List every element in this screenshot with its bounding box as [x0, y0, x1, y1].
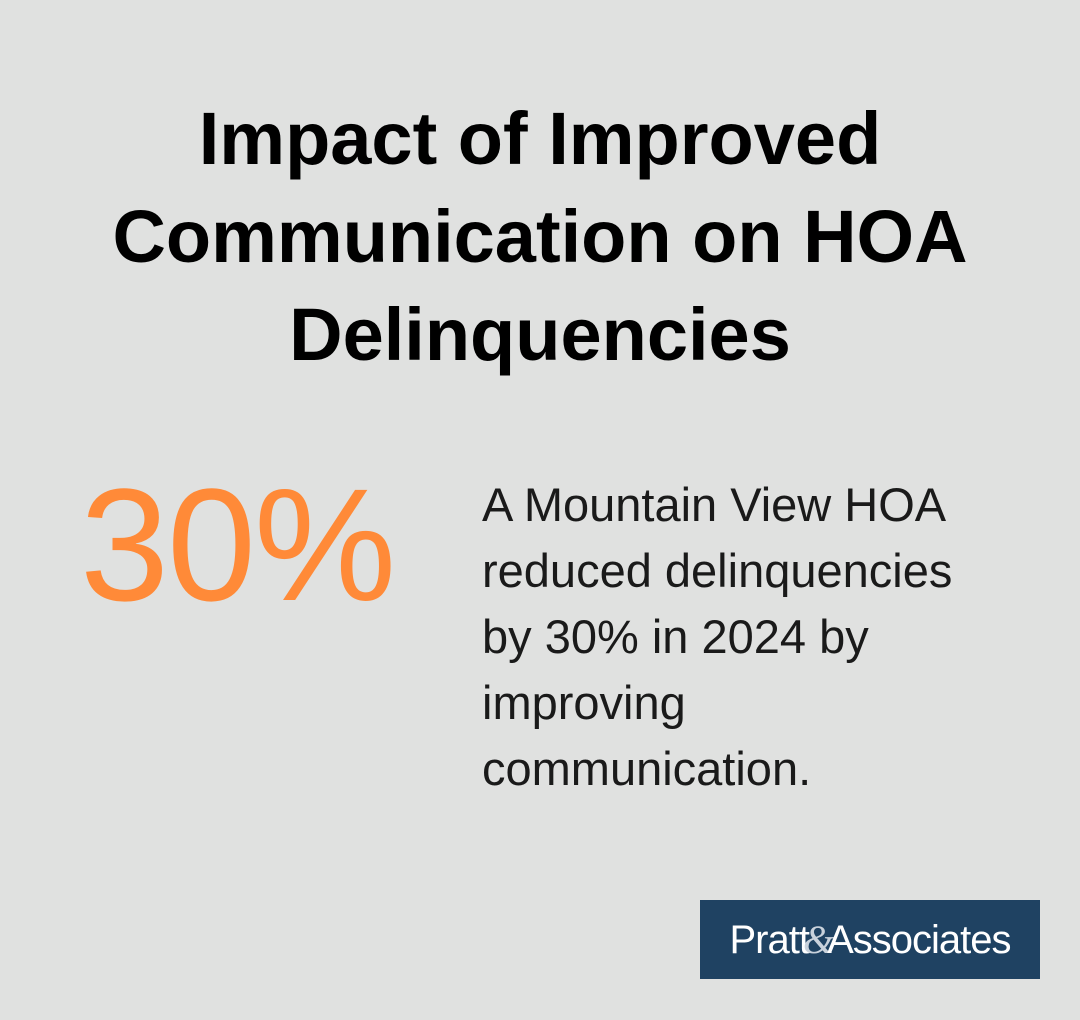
title: Impact of Improved — [199, 97, 881, 180]
description text: by 30% in 2024 by — [482, 610, 869, 663]
description text: reduced delinquencies — [482, 544, 952, 597]
description text — [482, 478, 952, 795]
big stat: 30%: 30% — [80, 455, 394, 634]
title — [112, 97, 968, 376]
description text: A Mountain View HOA — [482, 478, 946, 531]
description text: communication. — [482, 742, 811, 795]
logo: Pratt & Associates: Pratt&Associates — [729, 917, 1011, 962]
title: Communication on HOA — [112, 195, 968, 278]
description text: improving — [482, 676, 686, 729]
logo: Pratt & Associates — [700, 900, 1040, 979]
title: Delinquencies — [289, 293, 791, 376]
